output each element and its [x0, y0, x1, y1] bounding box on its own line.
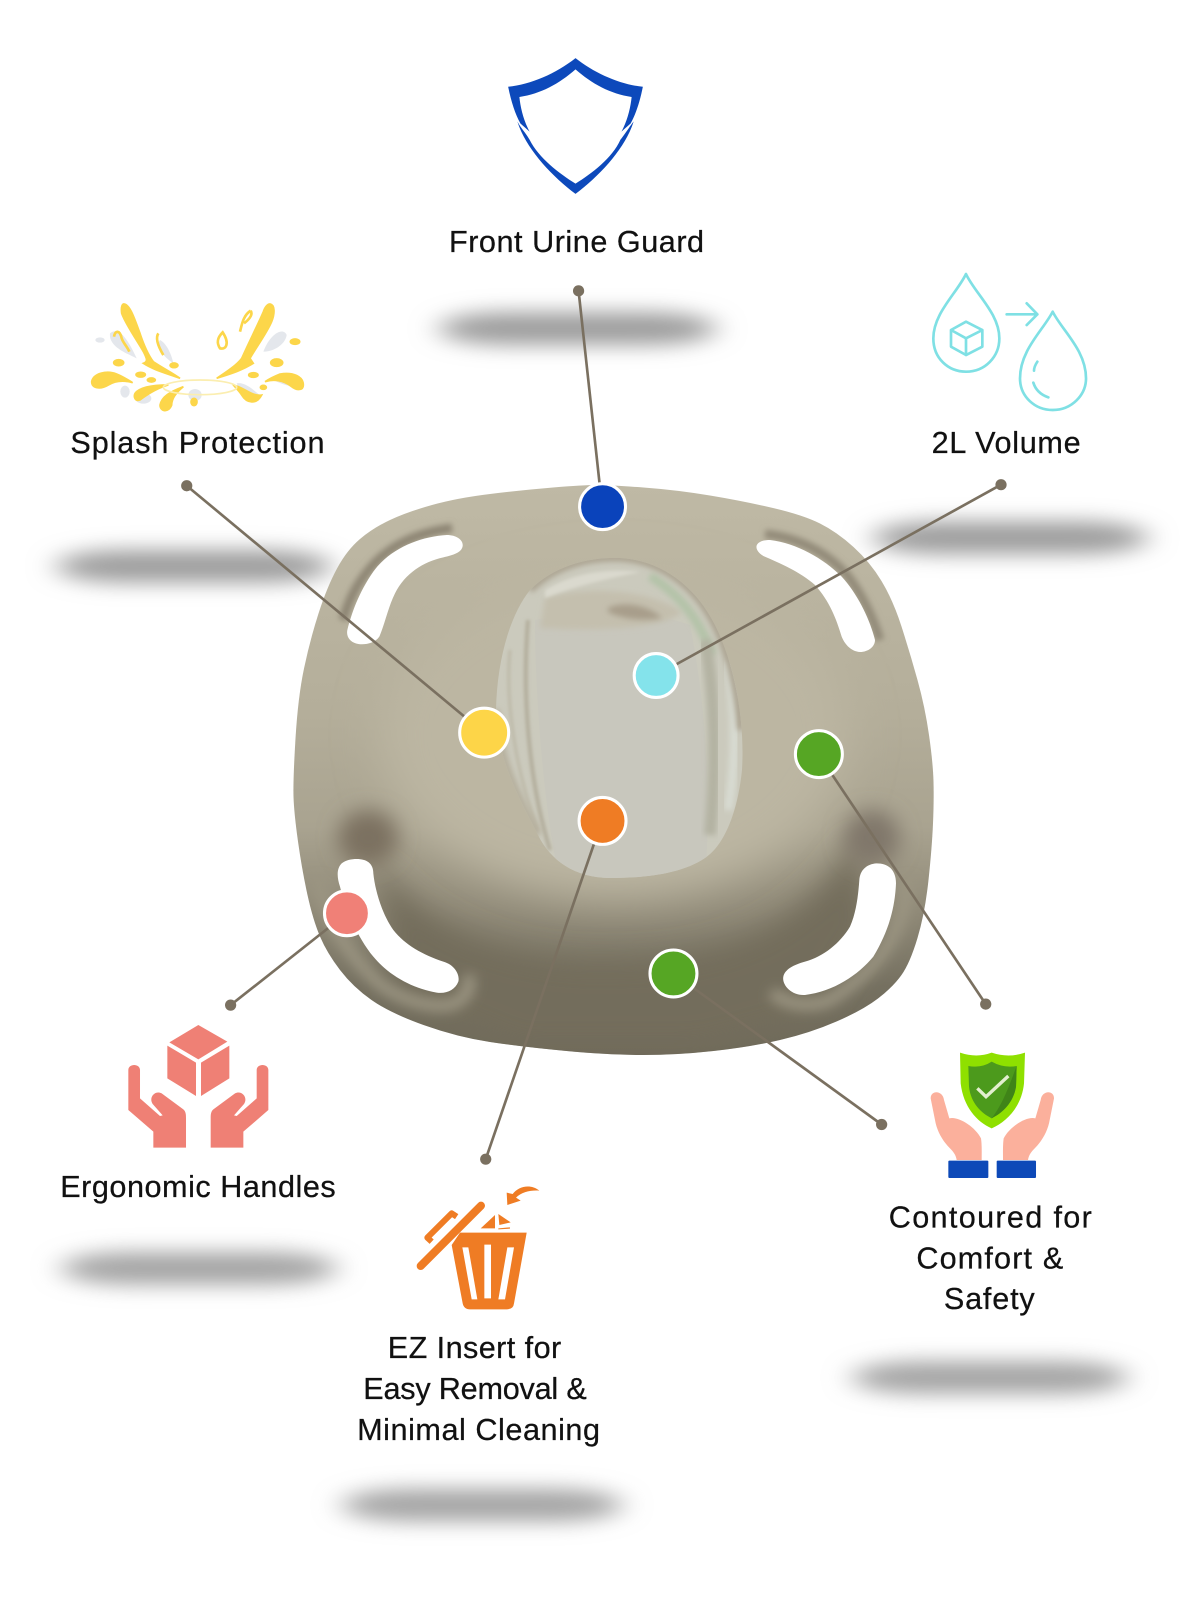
marker: green upper	[795, 731, 842, 778]
shadow above lower left slot	[338, 810, 398, 866]
handle slot: lower right	[783, 863, 896, 995]
label: Contoured for Comfort and Safety	[889, 1201, 1092, 1316]
label: 2L Volume: 2L Volume	[932, 426, 1081, 460]
lit dome around the opening	[392, 713, 838, 920]
connector: Splash Protection	[181, 480, 484, 733]
connector: 2L Volume	[656, 479, 1007, 676]
label: Splash Protection: Splash Protection	[70, 426, 324, 460]
label: EZ Insert: Minimal Cleaning	[357, 1413, 600, 1447]
side falloff	[280, 640, 306, 860]
label: Front Urine Guard: Front Urine Guard	[449, 225, 704, 259]
shadow: top	[439, 312, 716, 345]
product: toilet seat insert	[280, 480, 950, 1060]
label: Contoured for Comfort and Safety: Contoured for	[889, 1201, 1092, 1235]
shadow: lower right	[852, 1361, 1128, 1394]
connector: Contoured lower	[673, 973, 887, 1130]
shadow: upper left	[56, 550, 332, 583]
marker: salmon	[324, 891, 369, 936]
label: EZ Insert: Easy Removal &	[363, 1372, 587, 1406]
icon: blue shield	[508, 58, 643, 194]
icon: water drops	[933, 274, 1086, 410]
connector: Front Urine Guard	[573, 285, 602, 506]
icon: hands holding box	[128, 1025, 268, 1148]
label: Contoured for Comfort and Safety: Comfort &	[916, 1241, 1063, 1275]
icon: hands with green shield	[931, 1053, 1054, 1178]
handle slot: upper right	[756, 540, 875, 652]
label: EZ Insert	[357, 1331, 600, 1447]
marker: orange	[579, 797, 626, 844]
marker: green lower	[650, 950, 697, 997]
shadow: lower left	[61, 1252, 337, 1285]
icon: orange bin	[421, 1187, 539, 1309]
connector: EZ Insert	[480, 820, 602, 1165]
marker: yellow	[460, 708, 509, 757]
rims of the lower slots	[328, 930, 480, 1016]
shadow: upper right	[872, 521, 1148, 554]
label: Ergonomic Handles: Ergonomic Handles	[60, 1170, 336, 1204]
marker: blue	[580, 484, 626, 530]
shadow above lower right slot	[844, 810, 900, 866]
marker: cyan	[634, 654, 678, 697]
connector: Ergonomic Handles	[225, 913, 347, 1011]
seat opening	[496, 558, 742, 878]
connector: Contoured upper	[818, 754, 991, 1010]
icon: yellow splash	[92, 304, 303, 411]
handle slot: upper left	[347, 535, 463, 644]
shadow: bottom centre	[342, 1489, 622, 1521]
shadow over upper slots	[343, 528, 452, 620]
label: Contoured for Comfort and Safety: Safety	[944, 1282, 1035, 1316]
label: EZ Insert: EZ Insert for	[388, 1331, 561, 1365]
handle slot: lower left	[338, 859, 459, 993]
dark band below the dome	[375, 835, 870, 1050]
